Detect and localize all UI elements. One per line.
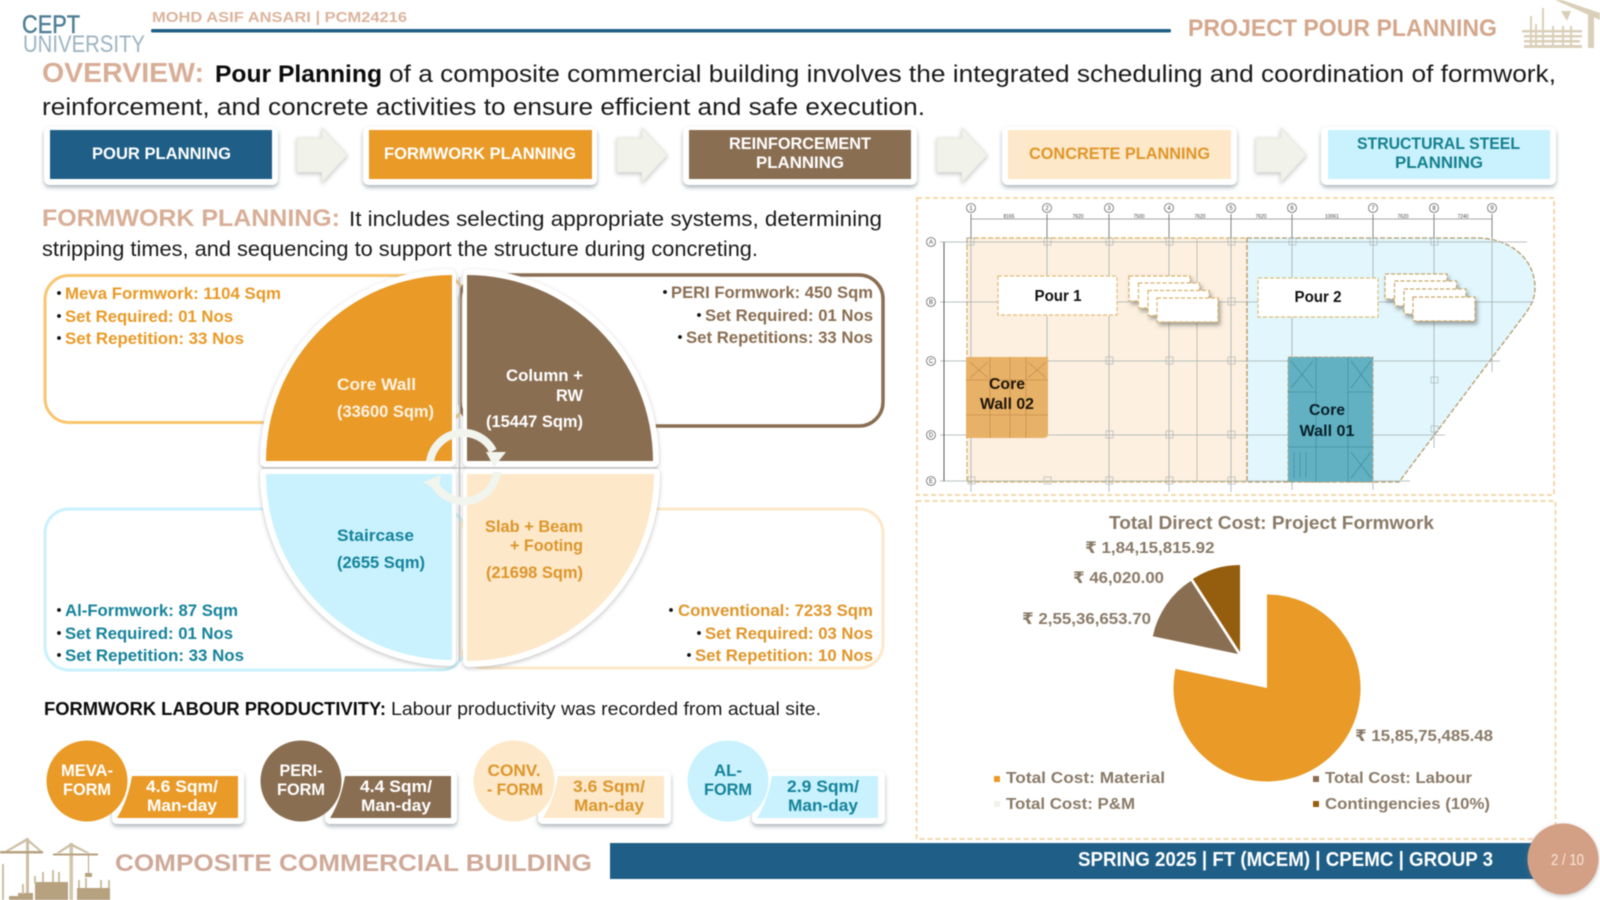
footer bar [610, 843, 1570, 879]
pour 1 zone [967, 238, 1247, 482]
grid labels: 8 [1432, 206, 1436, 212]
panel: peri formwork: PERI Formwork: 450 Sqm [671, 284, 873, 302]
productivity: meva-form: 4.6 Sqm/ [146, 778, 218, 796]
step: concrete planning [1002, 127, 1237, 185]
icon: circular arrows [423, 433, 506, 501]
panel: meva formwork: Meva Formwork: 1104 Sqm [65, 285, 281, 303]
pour 2 stacked cards [1385, 274, 1475, 321]
grid labels: 7500 [1133, 214, 1145, 220]
productivity: meva-form: FORM [63, 781, 111, 799]
core wall 02: Wall 02 [980, 396, 1034, 413]
grid labels: 5 [1229, 206, 1233, 212]
chart title: Total Direct Cost: Project Formwork [1109, 513, 1435, 533]
legend: Total Cost: Labour [1325, 770, 1472, 787]
page number badge: 2 / 10 [1551, 852, 1584, 869]
productivity: al-form: Man-day [788, 797, 859, 815]
panel: al-formwork [45, 509, 465, 670]
overview statement: OVERVIEW: [42, 57, 204, 88]
productivity: al-form: AL- [714, 762, 742, 780]
productivity: peri-form: Man-day [361, 797, 432, 815]
pour 2 label: Pour 2 [1294, 289, 1342, 306]
productivity: peri-form [260, 740, 457, 824]
productivity: conv-form [474, 740, 671, 824]
labour productivity heading [44, 699, 821, 719]
core wall 02 [966, 357, 1048, 438]
quadrant: staircase [266, 474, 452, 660]
quadrant: column + RW: Column + [506, 367, 583, 385]
grid labels: 4 [1167, 206, 1171, 212]
step: structural steel planning: STRUCTURAL STEEL [1357, 134, 1520, 153]
productivity: al-form: FORM [704, 781, 752, 799]
panel: peri formwork [460, 275, 883, 426]
column bubbles [926, 204, 1496, 486]
formwork planning intro: It includes selecting appropriate systems, determining [349, 208, 882, 231]
overview statement: reinforcement, and concrete activities to ensure efficient and safe execution. [42, 94, 925, 121]
legend: Total Cost: P&M [1006, 796, 1135, 813]
panel: peri formwork: Set Required: 01 Nos [705, 307, 873, 325]
footer bar: SPRING 2025 | FT (MCEM) | CPEMC | GROUP 3 [1078, 849, 1493, 871]
arrow [1256, 128, 1306, 182]
arrow [617, 128, 667, 182]
quadrant: column + RW [467, 275, 653, 461]
core wall 02: Core [989, 376, 1025, 393]
quadrant: core wall: (33600 Sqm) [337, 403, 434, 421]
grid labels: 9 [1490, 206, 1494, 212]
grid labels: 7620 [1255, 214, 1267, 220]
grid labels: 7 [1371, 206, 1375, 212]
core wall 01: Core [1309, 402, 1345, 419]
data labels: ₹ 1,84,15,815.92 [1085, 540, 1215, 557]
grid labels: 6 [1290, 206, 1294, 212]
productivity: conv-form: 3.6 Sqm/ [573, 778, 645, 796]
grid labels: 1 [969, 206, 973, 212]
grid labels [929, 206, 1494, 485]
productivity: peri-form: FORM [277, 781, 325, 799]
panel: cost chart [916, 501, 1556, 839]
labour productivity heading: FORMWORK LABOUR PRODUCTIVITY: [44, 699, 386, 719]
panel: conventional formwork: Set Required: 03 Nos [705, 625, 873, 643]
quadrant: column + RW: (15447 Sqm) [486, 413, 583, 431]
panel: floor plan [917, 198, 1554, 495]
quadrant: core wall: Core Wall [337, 376, 416, 394]
core wall 01 [1288, 357, 1373, 482]
panel: al-formwork: Al-Formwork: 87 Sqm [65, 602, 238, 620]
quadrant: slab + beam + footing: + Footing [510, 537, 583, 555]
panel: al-formwork: Set Repetition: 33 Nos [65, 647, 244, 665]
quadrant: core wall [266, 275, 452, 461]
header title: PROJECT POUR PLANNING [1188, 15, 1497, 42]
pour 1 label: Pour 1 [1034, 288, 1082, 305]
panel: al-formwork: Set Required: 01 Nos [65, 625, 233, 643]
arrow [297, 128, 347, 182]
grid labels: 3 [1107, 206, 1111, 212]
header logo: CEPT University: CEPT [22, 11, 80, 39]
legend [994, 770, 1490, 813]
pour 2 zone [1247, 238, 1535, 482]
quadrant diagram [262, 275, 657, 661]
quadrant: staircase: Staircase [337, 527, 414, 545]
process flow [44, 127, 1556, 185]
data labels [1022, 540, 1493, 745]
footer project title: COMPOSITE COMMERCIAL BUILDING [115, 850, 592, 877]
pour 1 label [998, 276, 1117, 315]
grid labels: B [929, 300, 933, 306]
grid labels: E [929, 479, 933, 485]
labour productivity heading: Labour productivity was recorded from actual site. [391, 699, 821, 719]
legend: Contingencies (10%) [1325, 796, 1490, 813]
grid labels: 10061 [1325, 214, 1339, 220]
productivity: meva-form: Man-day [147, 797, 218, 815]
icon: bottom cranes and skyline [0, 838, 110, 900]
data labels: ₹ 15,85,75,485.48 [1355, 728, 1493, 745]
grid labels: A [929, 240, 933, 246]
productivity: al-form: 2.9 Sqm/ [787, 778, 859, 796]
data labels: ₹ 46,020.00 [1073, 570, 1164, 587]
arrow [937, 128, 987, 182]
header logo: CEPT University: UNIVERSITY [23, 31, 145, 58]
quadrant: slab + beam + footing: Slab + Beam [485, 518, 583, 536]
overview statement: Pour Planning [215, 61, 382, 88]
panel: meva formwork: Set Required: 01 Nos [65, 308, 233, 326]
formwork planning intro: FORMWORK PLANNING: [42, 205, 340, 232]
productivity: meva-form: MEVA- [61, 762, 113, 780]
grid markers [967, 238, 1438, 484]
grid labels: C [929, 359, 934, 365]
step: reinforcement planning [683, 127, 917, 185]
pour 1 stacked cards [1129, 276, 1218, 322]
quadrant: slab + beam + footing: (21698 Sqm) [486, 564, 583, 582]
overview statement: of a composite commercial building involves the integrated scheduling and coordination of formwork, [389, 61, 1556, 88]
step: structural steel planning [1321, 127, 1556, 185]
formwork planning intro [42, 205, 882, 261]
pie chart [1153, 565, 1361, 782]
header rule [151, 29, 1171, 32]
grid labels: 7620 [1397, 214, 1409, 220]
step: pour planning [44, 127, 278, 185]
productivity: peri-form: 4.4 Sqm/ [360, 778, 432, 796]
quadrant: slab + beam + footing [467, 474, 654, 661]
pour 2 label [1258, 278, 1378, 317]
grid labels: 2 [1045, 206, 1049, 212]
productivity: meva-form [46, 740, 244, 824]
core wall 01: Wall 01 [1300, 423, 1355, 440]
step: reinforcement planning: REINFORCEMENT [729, 134, 872, 153]
grid labels: 8165 [1003, 214, 1015, 220]
icon: building under construction with crane [1522, 0, 1600, 48]
grid labels: 7620 [1072, 214, 1084, 220]
page number badge [1528, 824, 1598, 894]
step: concrete planning: CONCRETE PLANNING [1029, 144, 1210, 163]
productivity: peri-form: PERI- [280, 762, 322, 780]
header author name: MOHD ASIF ANSARI | PCM24216 [152, 9, 407, 26]
header logo: CEPT University [22, 11, 145, 58]
grid labels: 7620 [1194, 214, 1206, 220]
quadrant: staircase: (2655 Sqm) [337, 554, 425, 572]
productivity: conv-form: CONV. [488, 762, 540, 780]
panel: meva formwork: Set Repetition: 33 Nos [65, 330, 244, 348]
quadrant: column + RW: RW [556, 387, 583, 405]
overview statement [42, 57, 1556, 121]
structural grid [940, 214, 1534, 492]
data labels: ₹ 2,55,36,653.70 [1022, 611, 1151, 628]
panel: peri formwork: Set Repetitions: 33 Nos [686, 329, 873, 347]
panel: conventional formwork: Conventional: 7233 Sqm [678, 602, 873, 620]
step: reinforcement planning: PLANNING [756, 153, 844, 172]
productivity: al-form [688, 740, 885, 824]
step: structural steel planning: PLANNING [1395, 153, 1483, 172]
productivity: conv-form: - FORM [487, 781, 543, 799]
quadrant separators [262, 277, 657, 661]
step: pour planning: POUR PLANNING [92, 144, 231, 163]
legend: Total Cost: Material [1006, 770, 1165, 787]
panel: meva formwork [45, 276, 465, 422]
step: formwork planning: FORMWORK PLANNING [384, 144, 576, 163]
panel: conventional formwork [460, 509, 883, 668]
grid labels: 7240 [1457, 214, 1469, 220]
grid labels: D [929, 433, 934, 439]
panel: conventional formwork: Set Repetition: 10 Nos [695, 647, 873, 665]
step: formwork planning [363, 127, 597, 185]
productivity: conv-form: Man-day [574, 797, 645, 815]
formwork planning intro: stripping times, and sequencing to support the structure during concreting. [42, 238, 758, 261]
